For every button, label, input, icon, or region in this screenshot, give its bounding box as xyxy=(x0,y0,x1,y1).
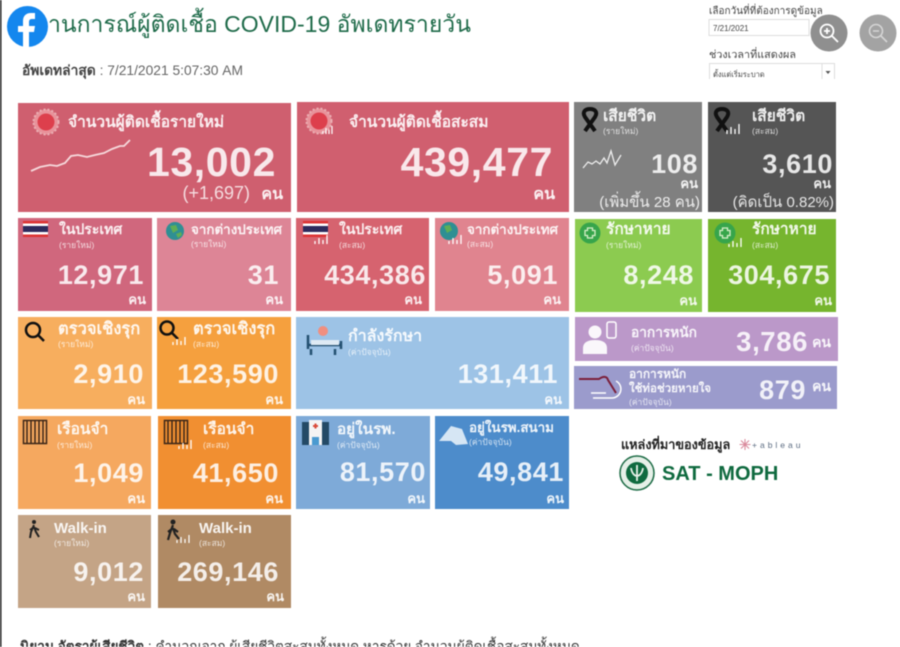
heading: รักษาหาย xyxy=(752,221,817,238)
heading: เรือนจำ xyxy=(57,420,108,438)
value: 2,910 xyxy=(73,359,144,389)
sparkline xyxy=(31,140,130,171)
heading: อยู่ในรพ. xyxy=(337,419,396,439)
time range filter: ตั้งแต่เริ่มระบาด xyxy=(713,69,765,79)
value: 31 xyxy=(248,260,279,290)
panel: cumulative deaths xyxy=(708,102,836,212)
subheading: (รายใหม่) xyxy=(191,239,227,249)
icon: intubation tube xyxy=(579,377,621,398)
panel: domestic cumulative xyxy=(296,218,429,311)
unit: คน xyxy=(812,378,831,394)
value: 5,091 xyxy=(487,260,558,290)
last updated timestamp: อัพเดทล่าสุด : 7/21/2021 5:07:30 AM xyxy=(22,63,243,79)
subheading: (สะสม) xyxy=(752,240,778,250)
value: 434,386 xyxy=(324,260,426,290)
unit: คน xyxy=(679,293,697,308)
unit: คน xyxy=(404,292,422,307)
date filter xyxy=(709,3,823,36)
panel: severe symptoms xyxy=(575,317,838,361)
icon: virus xyxy=(306,108,332,134)
note: (เพิ่มขึ้น 28 คน) xyxy=(599,191,700,211)
icon: black ribbon xyxy=(584,109,596,131)
SAT-MOPH label: SAT - MOPH xyxy=(662,463,778,485)
icon: globe xyxy=(440,222,461,244)
heading: รักษาหาย xyxy=(606,221,671,238)
tableau logo: +ableau xyxy=(752,440,804,450)
value: 131,411 xyxy=(458,359,558,389)
icon: facebook logo xyxy=(7,6,48,47)
panel: active case finding cumulative xyxy=(157,317,291,409)
heading: Walk-in xyxy=(54,520,107,537)
value: 81,570 xyxy=(340,457,426,487)
subheading: intubated: ใช้ท่อช่วยหายใจ xyxy=(629,381,711,395)
subheading: (สะสม) xyxy=(752,126,778,136)
value: 439,477 xyxy=(401,139,553,185)
heading: อาการหนัก xyxy=(629,367,686,381)
heading: อาการหนัก xyxy=(631,325,697,340)
panel: walk-in new xyxy=(18,515,151,608)
panel: in hospital xyxy=(296,416,430,509)
date filter: 7/21/2021 xyxy=(713,24,749,33)
value: 108 xyxy=(651,149,698,179)
heading: อยู่ในรพ.สนาม xyxy=(469,419,554,436)
panel: under treatment xyxy=(296,317,569,409)
panel: domestic new xyxy=(18,218,152,311)
heading: ในประเทศ xyxy=(339,220,403,237)
icon: virus xyxy=(34,110,58,134)
subheading: (รายใหม่) xyxy=(57,440,93,450)
panel: walk-in cumulative xyxy=(158,515,291,608)
subheading: (สะสม) xyxy=(199,538,225,548)
icon: hospital bed xyxy=(308,326,341,355)
heading: เรือนจำ xyxy=(203,420,254,438)
heading: จากต่างประเทศ xyxy=(467,222,559,237)
panel: cumulative cases xyxy=(297,102,569,212)
icon: magnifier xyxy=(26,323,44,341)
unit: คน xyxy=(127,392,145,407)
unit: คน xyxy=(812,334,831,350)
unit: คน xyxy=(128,292,146,307)
unit: คน xyxy=(265,392,283,407)
icon: tent xyxy=(439,426,468,445)
value: 304,675 xyxy=(728,260,830,290)
value: 123,590 xyxy=(177,359,279,389)
subheading: (ค่าปัจจุบัน) xyxy=(337,440,380,451)
icon: walking person xyxy=(30,520,39,538)
value: 3,610 xyxy=(762,149,833,179)
icon: black ribbon xyxy=(716,109,739,134)
icon: magnifier xyxy=(160,322,185,345)
heading: ในประเทศ xyxy=(59,220,123,237)
title: สถานการณ์ผู้ติดเชื้อ COVID-19 อัพเดทรายวัน xyxy=(20,8,471,38)
panel: imported new xyxy=(157,218,291,311)
icon: zoom in xyxy=(810,14,848,52)
heading: เสียชีวิต xyxy=(752,107,805,125)
value: 9,012 xyxy=(73,557,144,587)
unit: คน xyxy=(261,186,283,203)
subheading: (รายใหม่) xyxy=(54,538,90,548)
unit: คน xyxy=(127,491,145,506)
icon: thai flag xyxy=(303,221,328,244)
unit: คน xyxy=(680,176,698,191)
unit: คน xyxy=(127,589,145,604)
heading: จำนวนผู้ติดเชื้อสะสม xyxy=(349,110,488,133)
value: 269,146 xyxy=(177,557,279,587)
subheading: (ค่าปัจจุบัน) xyxy=(631,343,674,354)
icon: prison bars xyxy=(24,420,46,444)
subheading: (รายใหม่) xyxy=(603,126,639,136)
panel: field hospital xyxy=(435,416,569,509)
unit: คน xyxy=(266,589,284,604)
subheading: (ค่าปัจจุบัน) xyxy=(629,397,672,408)
icon: walking person xyxy=(168,520,189,543)
icon: patient with iv xyxy=(583,322,616,354)
subheading: (สะสม) xyxy=(339,240,365,250)
subheading: (สะสม) xyxy=(467,239,493,249)
time range filter xyxy=(709,47,834,79)
unit: คน xyxy=(543,292,561,307)
panel: correctional new xyxy=(18,416,151,509)
subheading: (สะสม) xyxy=(203,440,229,450)
value: 879 xyxy=(759,375,806,405)
icon: prison bars xyxy=(164,420,191,449)
data source heading: แหล่งที่มาของข้อมูล xyxy=(621,435,730,453)
subheading: (รายใหม่) xyxy=(59,240,95,250)
value: 49,841 xyxy=(478,457,564,487)
value: 3,786 xyxy=(736,326,808,357)
panel: correctional cumulative xyxy=(158,416,291,509)
panel: new cases xyxy=(18,103,291,212)
heading: ตรวจเชิงรุก xyxy=(193,319,275,339)
sparkline xyxy=(583,151,621,168)
icon: zoom out xyxy=(860,14,896,52)
subheading: (ค่าปัจจุบัน) xyxy=(469,437,512,448)
value: 41,650 xyxy=(193,458,279,488)
icon: globe xyxy=(166,222,184,240)
unit: คน xyxy=(407,491,425,506)
unit: คน xyxy=(544,392,562,407)
heading: ตรวจเชิงรุก xyxy=(58,319,140,339)
value: 1,049 xyxy=(73,458,144,488)
unit: คน xyxy=(814,293,832,308)
panel: ventilator xyxy=(574,366,837,409)
icon: MOPH seal xyxy=(620,456,654,490)
time range filter: ช่วงเวลาที่แสดงผล xyxy=(709,47,796,61)
heading: จากต่างประเทศ xyxy=(191,222,283,237)
unit: คน xyxy=(546,491,564,506)
change: (+1,697) xyxy=(182,183,250,203)
value: 12,971 xyxy=(58,260,144,290)
panel: recovered new xyxy=(575,219,702,312)
heading: เสียชีวิต xyxy=(603,107,656,125)
icon: hospital building xyxy=(302,420,329,445)
subheading: (สะสม) xyxy=(193,339,219,349)
panel: new deaths xyxy=(574,102,702,212)
unit: คน xyxy=(265,292,283,307)
icon: medical cross xyxy=(580,222,600,244)
panel: active case finding new xyxy=(18,317,152,409)
value: 13,002 xyxy=(147,139,276,185)
unit: คน xyxy=(813,176,831,191)
value: 8,248 xyxy=(623,260,694,290)
heading: จำนวนผู้ติดเชื้อรายใหม่ xyxy=(68,110,224,133)
unit: คน xyxy=(533,186,555,203)
subheading: (รายใหม่) xyxy=(58,339,94,349)
note: (คิดเป็น 0.82%) xyxy=(733,192,834,211)
panel: recovered cumulative xyxy=(708,219,836,312)
icon: thai flag xyxy=(23,221,48,237)
icon: medical cross xyxy=(714,222,741,247)
subheading: (ค่าปัจจุบัน) xyxy=(348,347,391,358)
unit: คน xyxy=(265,491,283,506)
panel: imported cumulative xyxy=(435,218,569,311)
subheading: (รายใหม่) xyxy=(606,240,642,250)
heading: กำลังรักษา xyxy=(348,327,422,345)
heading: Walk-in xyxy=(199,520,252,537)
date filter: เลือกวันที่ที่ต้องการดูข้อมูล xyxy=(709,3,823,17)
